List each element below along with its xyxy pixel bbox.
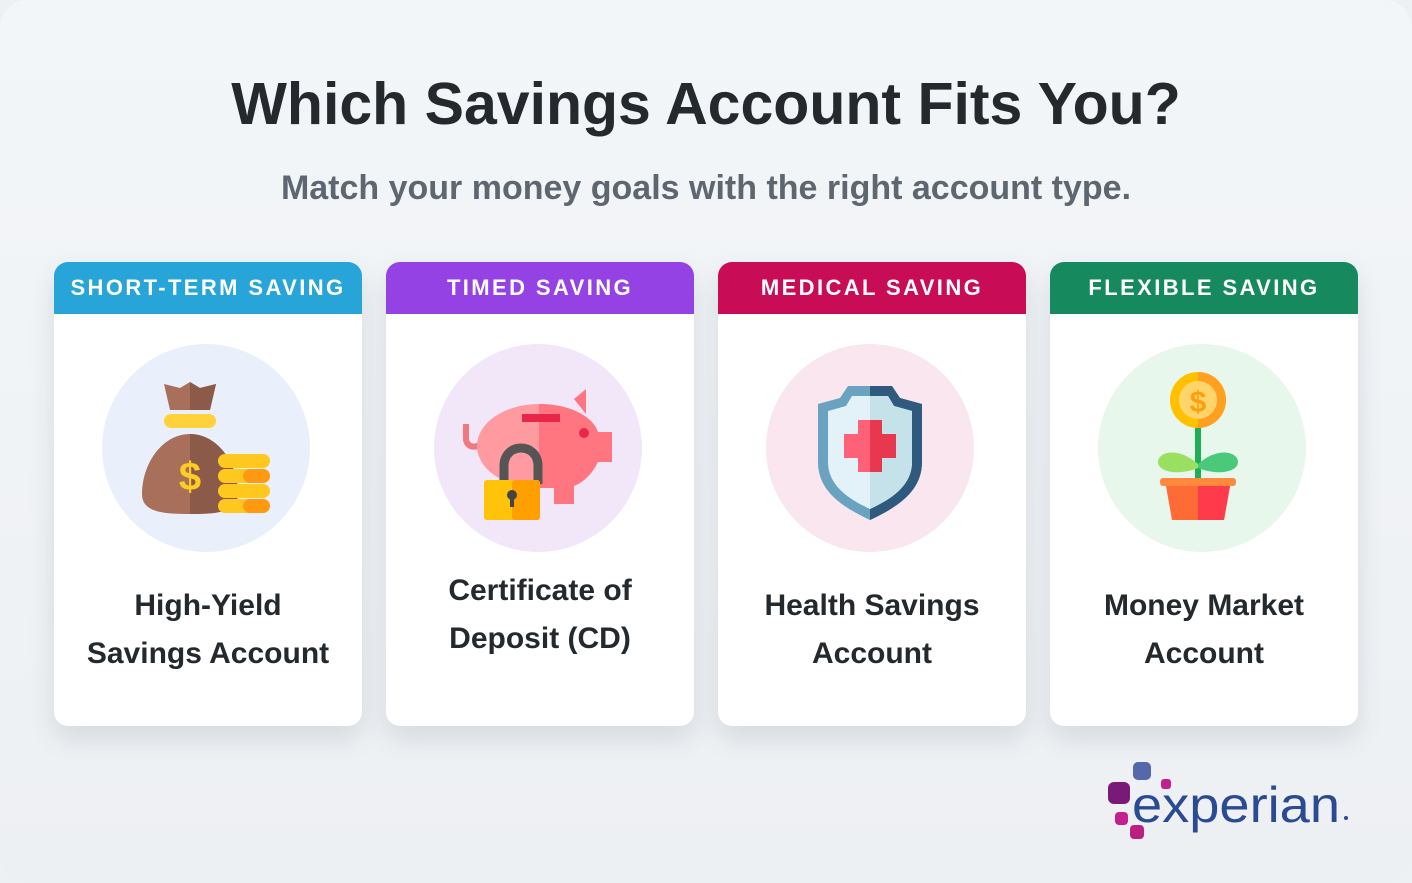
panel: certificate of deposit (386, 262, 694, 726)
label (764, 589, 980, 670)
header: medical saving: MEDICAL SAVING (761, 275, 983, 300)
header: flexible saving (1050, 262, 1358, 314)
icon: shield with cross (766, 344, 974, 552)
header: short-term saving: SHORT-TERM SAVING (70, 275, 346, 300)
header: flexible saving: FLEXIBLE SAVING (1088, 275, 1320, 300)
header: timed saving (386, 262, 694, 314)
logo: experian: experian (1132, 777, 1340, 833)
label: Deposit (CD) (449, 622, 631, 655)
icon: coin plant (1098, 344, 1306, 552)
label (448, 574, 632, 655)
header: short-term saving (54, 262, 362, 314)
panel: high-yield savings (54, 262, 362, 726)
label: Savings Account (87, 637, 329, 670)
label: Money Market (1104, 589, 1304, 622)
title: Which Savings Account Fits You? (231, 71, 1181, 137)
header: medical saving (718, 262, 1026, 314)
label (1104, 589, 1304, 670)
panel: money market (1050, 262, 1358, 726)
icon: coin plant: $ (1190, 386, 1207, 419)
logo: experian (1108, 762, 1348, 839)
label: Account (1144, 637, 1264, 670)
label: Health Savings (764, 589, 980, 622)
icon: money bag (102, 344, 310, 552)
icon: money bag: $ (179, 455, 201, 499)
label: Account (812, 637, 932, 670)
subtitle: Match your money goals with the right account type. (281, 169, 1131, 207)
panel: health savings (718, 262, 1026, 726)
icon: piggy bank with lock (434, 344, 642, 552)
label: Certificate of (448, 574, 632, 607)
label: High-Yield (134, 589, 282, 622)
label (87, 589, 329, 670)
header: timed saving: TIMED SAVING (447, 275, 633, 300)
